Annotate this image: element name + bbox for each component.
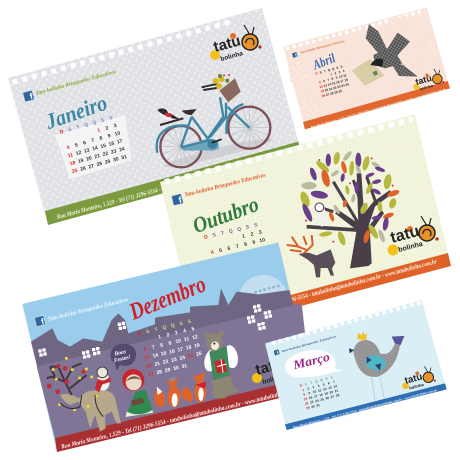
logo: tatu bolinha	[387, 216, 439, 255]
calendar: January: 15	[100, 143, 107, 150]
calendar: December	[137, 318, 205, 378]
calendar: April: 25	[345, 82, 350, 87]
icon: facebook: f	[276, 350, 280, 355]
calendar: April: 28	[330, 91, 334, 96]
calendar: March: S	[304, 382, 308, 386]
calendar: October: 1	[242, 233, 246, 240]
binding holes	[165, 119, 413, 182]
calendar backdrop	[55, 115, 132, 179]
city silhouette	[31, 288, 310, 438]
calendar: January: T	[76, 124, 80, 131]
icon: facebook: f	[177, 195, 184, 205]
calendar: March: 10	[312, 389, 317, 394]
calendar: March: 6	[328, 381, 330, 385]
owl	[314, 203, 328, 227]
calendar: December: 22	[162, 359, 169, 366]
sky background	[22, 242, 313, 452]
calendar: April: S	[336, 66, 339, 70]
calendar: October: D	[204, 234, 209, 241]
calendar: December: 20	[146, 363, 153, 370]
sleigh silhouette	[254, 285, 282, 292]
calendar: December: 31	[181, 363, 188, 370]
calendar: March: Q	[320, 378, 324, 382]
logo: tatu bolinha	[210, 25, 262, 63]
calendar: January: 22	[102, 151, 109, 158]
calendar: April: 7	[327, 78, 330, 82]
calendar: December: 24	[179, 355, 186, 362]
logo: tatu bolinha: tatu	[212, 32, 243, 56]
speech bubble: Boas Festas	[110, 344, 136, 371]
calendar: October: S	[254, 222, 259, 229]
binding holes	[272, 303, 421, 343]
orange footer band	[303, 81, 450, 129]
panel: Abril card	[283, 7, 450, 129]
calendar: October: 2	[250, 231, 254, 238]
green footer band	[45, 142, 302, 225]
calendar: April: 21	[328, 87, 333, 91]
orange footer band	[193, 253, 451, 334]
calendar: December: 27	[148, 371, 155, 378]
moon	[238, 275, 288, 325]
title: Janeiro: Janeiro	[41, 90, 110, 134]
calendar: October: T	[220, 230, 225, 237]
calendar: December: Q	[162, 325, 167, 331]
footer address: Rua Maria Monteiro, 1.529 - Tel (71) 3296-5554 - tatubolinha@tatubolinha.com.br - www.tatubolinha.com.br	[293, 388, 438, 429]
panel: Outubro card	[160, 114, 451, 334]
calendar: April: 13	[323, 83, 328, 88]
calendar: January: 21	[94, 153, 101, 160]
calendar: December: Q	[170, 323, 176, 329]
binding holes	[13, 22, 230, 82]
calendar: January: 4	[66, 145, 71, 151]
calendar: April: D	[315, 71, 319, 76]
calendar: October: 6	[227, 246, 231, 252]
calendar: April	[315, 64, 351, 98]
calendar: March: 17	[314, 394, 318, 399]
calendar: January: 23	[110, 148, 117, 156]
calendar: January: S	[100, 117, 106, 124]
calendar: March: 1	[302, 388, 305, 392]
header text: Tatu-bolinha Brinquedos Educativos	[281, 334, 338, 353]
calendar: January: S	[109, 115, 114, 122]
calendar: April: 24	[341, 83, 346, 88]
calendar: January: 12	[75, 150, 82, 157]
calendar: January: 5	[74, 142, 79, 149]
calendar: December: 12	[192, 334, 199, 341]
icon: facebook	[171, 194, 184, 207]
calendar: March: 19	[324, 391, 329, 396]
bird head	[370, 59, 383, 67]
speech bubble: Boas Festas: Festas!	[113, 354, 132, 364]
logo: tatu bolinha: bolinha	[398, 241, 424, 254]
calendar: March: 25	[320, 397, 325, 402]
footer address: Rua Maria Monteiro, 1.529 - Tel (71) 3296-5554 - tatubolinha@tatubolinha.com.br - www.tatubolinha.com.br	[55, 153, 287, 221]
calendar: April: 11	[343, 73, 347, 78]
calendar: January: 16	[108, 141, 115, 148]
calendar: October: Q	[237, 226, 242, 233]
calendar: January: 9	[107, 133, 112, 140]
calendar: April: 10	[339, 74, 343, 79]
illustration: fox left	[154, 377, 181, 407]
calendar: December: 5	[191, 326, 195, 333]
calendar: March: 15	[303, 397, 308, 401]
illustration: reindeer with lights	[47, 357, 121, 432]
calendar: December: 1	[158, 334, 162, 341]
calendar: December: 17	[177, 346, 184, 354]
calendar: October: 7	[235, 244, 240, 250]
calendar: April: 19	[320, 89, 325, 94]
calendar: January: 8	[99, 135, 103, 142]
calendar: March	[299, 375, 341, 411]
calendar: January: 19	[77, 158, 85, 165]
calendar: December: 3	[174, 330, 179, 337]
calendar: January: 1	[97, 127, 101, 134]
calendar: December: D	[137, 331, 142, 337]
card background	[160, 114, 451, 334]
calendar: March: 21	[334, 388, 339, 393]
calendar: March: 31	[316, 403, 321, 408]
calendar: March: S	[325, 376, 328, 381]
calendar: October: 4	[210, 250, 215, 256]
calendar: April: 2	[334, 71, 337, 75]
calendar: March: 28	[335, 393, 340, 398]
calendar: December: 8	[160, 342, 164, 349]
calendar: December: 7	[151, 344, 156, 351]
calendar: April: T	[323, 69, 326, 73]
calendar: January: Q	[92, 120, 97, 126]
calendar: December: 11	[183, 336, 190, 343]
calendar: April: 22	[333, 85, 337, 90]
header text: Tatu-bolinha Brinquedos Educativos	[35, 69, 117, 97]
calendar: March: 29	[306, 406, 310, 410]
calendar: April: 29	[334, 90, 338, 95]
title: Abril: Abril	[310, 50, 337, 73]
calendar: December: 29	[164, 367, 171, 374]
calendar: March: 27	[330, 394, 335, 399]
footer address: Rua Maria Monteiro, 1.529 - Tel (71) 3296-5554 - tatubolinha@tatubolinha.com.br - www.tatubolinha.com.br	[310, 87, 447, 129]
illustration: bear with gift	[202, 330, 240, 398]
calendar: January: 3	[113, 123, 118, 129]
calendar: January: 25	[71, 168, 79, 175]
calendar: October: 9	[252, 240, 256, 246]
binding holes	[286, 11, 425, 49]
footer address: Rua Maria Monteiro, 1.529 - Tel (71) 3296-5554 - tatubolinha@tatubolinha.com.br - www.tatubolinha.com.br	[60, 387, 299, 451]
calendar: March: 4	[317, 384, 320, 388]
calendar: April: 30	[338, 89, 343, 94]
calendar: October: S	[245, 224, 251, 231]
speech bubble	[285, 350, 342, 377]
calendar: April: Q	[331, 67, 335, 71]
calendar: January: 26	[80, 165, 87, 173]
calendar: October: 10	[259, 237, 266, 244]
illustration: deer	[287, 235, 335, 277]
calendar: December: 21	[154, 361, 161, 368]
calendar: April: 4	[342, 69, 345, 73]
calendar: March: 5	[322, 382, 325, 387]
calendar: April: 23	[337, 84, 341, 89]
calendar: January: 10	[114, 130, 121, 138]
header text: Tatu-bolinha Brinquedos Educativos	[300, 39, 346, 55]
calendar: January: 13	[83, 147, 91, 155]
windows	[38, 304, 272, 359]
calendar: December: 23	[171, 357, 178, 364]
calendar: January: 28	[96, 161, 103, 168]
logo: tatu bolinha: tatu	[414, 73, 433, 87]
logo: tatu bolinha: bolinha	[262, 373, 286, 386]
calendar: January: 31	[121, 154, 128, 161]
calendar: October: 3	[258, 229, 263, 236]
card background	[283, 7, 450, 129]
icon: facebook: f	[40, 316, 45, 327]
calendar: March: S	[330, 375, 333, 380]
speech bubble: Boas Festas: Boas	[113, 349, 128, 358]
illustration: fox right	[182, 372, 207, 402]
calendar: December: 4	[183, 328, 187, 335]
logo: tatu bolinha: bolinha	[408, 382, 425, 391]
calendar: March: 23	[310, 400, 314, 405]
calendar: April: 3	[338, 70, 341, 74]
calendar: March: T	[310, 381, 313, 385]
card background	[265, 300, 447, 430]
calendar: January: D	[59, 129, 65, 136]
icon: facebook: f	[29, 91, 34, 101]
calendar: March: 11	[318, 388, 322, 393]
calendar: October: 8	[244, 242, 248, 248]
illustration: crowned bird	[349, 332, 404, 400]
calendar: December: 16	[169, 348, 176, 356]
logo: tatu bolinha: tatu	[389, 223, 421, 247]
calendar: March: 22	[304, 401, 309, 406]
icon: facebook	[292, 52, 298, 58]
calendar: December: 25	[187, 353, 194, 360]
icon: facebook: f	[295, 52, 298, 58]
calendar: December: 14	[152, 352, 159, 360]
illustration: patterned bird	[366, 24, 418, 77]
logo: tatu bolinha	[402, 366, 436, 391]
icon: facebook	[23, 90, 35, 103]
calendar: January: 17	[116, 138, 123, 146]
calendar: March: 18	[319, 393, 323, 397]
calendar: April: 16	[336, 80, 340, 85]
calendar: April: S	[340, 65, 343, 69]
calendar: April: 8	[331, 77, 334, 81]
calendar: December: 9	[168, 340, 172, 347]
calendar: April: 1	[330, 72, 333, 77]
calendar: March: 16	[308, 395, 313, 400]
calendar: January	[59, 114, 128, 175]
title: Outubro: Outubro	[189, 191, 262, 238]
panel: Março card	[265, 300, 447, 430]
calendar: January: 18	[69, 160, 76, 167]
icon: facebook	[274, 349, 280, 356]
title: Dezembro: Dezembro	[125, 271, 210, 326]
illustration: bicycle	[157, 74, 274, 171]
calendar: January: 2	[105, 125, 109, 132]
calendar: April: 5	[319, 80, 322, 84]
logo: tatu bolinha: tatu	[404, 371, 424, 387]
card background	[8, 8, 302, 225]
calendar: October: 5	[219, 248, 223, 254]
calendar: January: 30	[112, 156, 120, 164]
calendar: December: S	[146, 329, 151, 335]
calendar: April: 14	[327, 82, 332, 87]
calendar: January: Q	[84, 122, 89, 129]
calendar: April: 6	[323, 79, 326, 83]
calendar: January: 29	[104, 159, 111, 166]
calendar: March: 9	[308, 391, 311, 395]
calendar: March: 26	[325, 396, 330, 401]
blue footer band	[285, 383, 447, 430]
header text: Tatu-bolinha Brinquedos Educativos	[47, 297, 130, 323]
calendar: December: 15	[160, 350, 167, 358]
calendar: December: 13	[144, 354, 151, 362]
calendar: March: 7	[333, 380, 336, 384]
calendar: January: 20	[86, 155, 93, 163]
logo: tatu bolinha: bolinha	[419, 83, 434, 91]
calendar: March: 13	[328, 385, 332, 390]
calendar: December: 18	[185, 344, 192, 352]
calendar: March: 30	[311, 404, 315, 409]
illustration: owl	[95, 367, 111, 392]
calendar: October	[204, 221, 266, 257]
title: Março: Março	[291, 350, 331, 373]
header text: Tatu-bolinha Brinquedos Educativos	[184, 172, 267, 199]
red footer band	[55, 377, 313, 452]
calendar: October: S	[212, 232, 217, 239]
calendar: December: T	[154, 327, 158, 333]
logo: tatu bolinha	[252, 355, 286, 386]
calendar: January: S	[68, 126, 73, 133]
calendar: April: S	[319, 70, 322, 75]
illustration: girl in red hood	[122, 369, 153, 417]
calendar: December: S	[187, 319, 193, 325]
calendar: December: 2	[166, 332, 170, 339]
calendar: December: S	[179, 321, 184, 327]
calendar: March: 20	[329, 390, 334, 395]
panel: Dezembro card	[22, 242, 313, 452]
logo: tatu bolinha: bolinha	[220, 50, 244, 63]
calendar: April: 12	[319, 84, 324, 89]
panel: Janeiro card	[8, 8, 302, 225]
calendar: March: 3	[312, 385, 315, 389]
calendar: March: 8	[303, 392, 306, 397]
logo: tatu bolinha	[413, 69, 444, 91]
calendar: December: 26	[196, 351, 203, 358]
calendar: December: 19	[194, 342, 201, 350]
calendar: April: Q	[327, 68, 331, 72]
calendar: January: 24	[118, 146, 126, 153]
illustration: postcard	[352, 59, 384, 85]
calendar: April: 9	[335, 76, 338, 80]
lower ground	[37, 303, 310, 438]
calendar: January: 7	[91, 138, 95, 144]
logo: tatu bolinha: tatu	[254, 355, 285, 379]
calendar: April: 20	[324, 88, 329, 92]
calendar: October: Q	[228, 228, 234, 235]
calendar: March: 14	[333, 384, 338, 389]
icon: facebook	[34, 315, 46, 328]
calendar: April: 26	[321, 93, 326, 98]
calendar: December: 30	[173, 365, 180, 372]
illustration: tree	[299, 150, 400, 268]
calendar: April: 17	[340, 79, 344, 84]
calendar: April: 15	[331, 81, 336, 86]
calendar: January: 11	[67, 152, 74, 159]
clouds	[288, 15, 439, 115]
calendar: December: 6	[143, 346, 147, 353]
calendar: March: 2	[307, 386, 310, 391]
calendar: March: 12	[323, 387, 327, 392]
calendar: April: 27	[326, 92, 330, 97]
calendar: January: 27	[88, 163, 95, 171]
calendar: March: 24	[315, 398, 319, 403]
calendar: December: 10	[175, 338, 182, 345]
calendar: March: Q	[315, 379, 319, 384]
calendar: March: D	[299, 383, 303, 388]
calendar: January: 6	[83, 140, 87, 147]
calendar: December: 28	[156, 369, 163, 376]
calendar: April: 18	[344, 78, 349, 82]
calendar: January: 14	[92, 145, 99, 152]
